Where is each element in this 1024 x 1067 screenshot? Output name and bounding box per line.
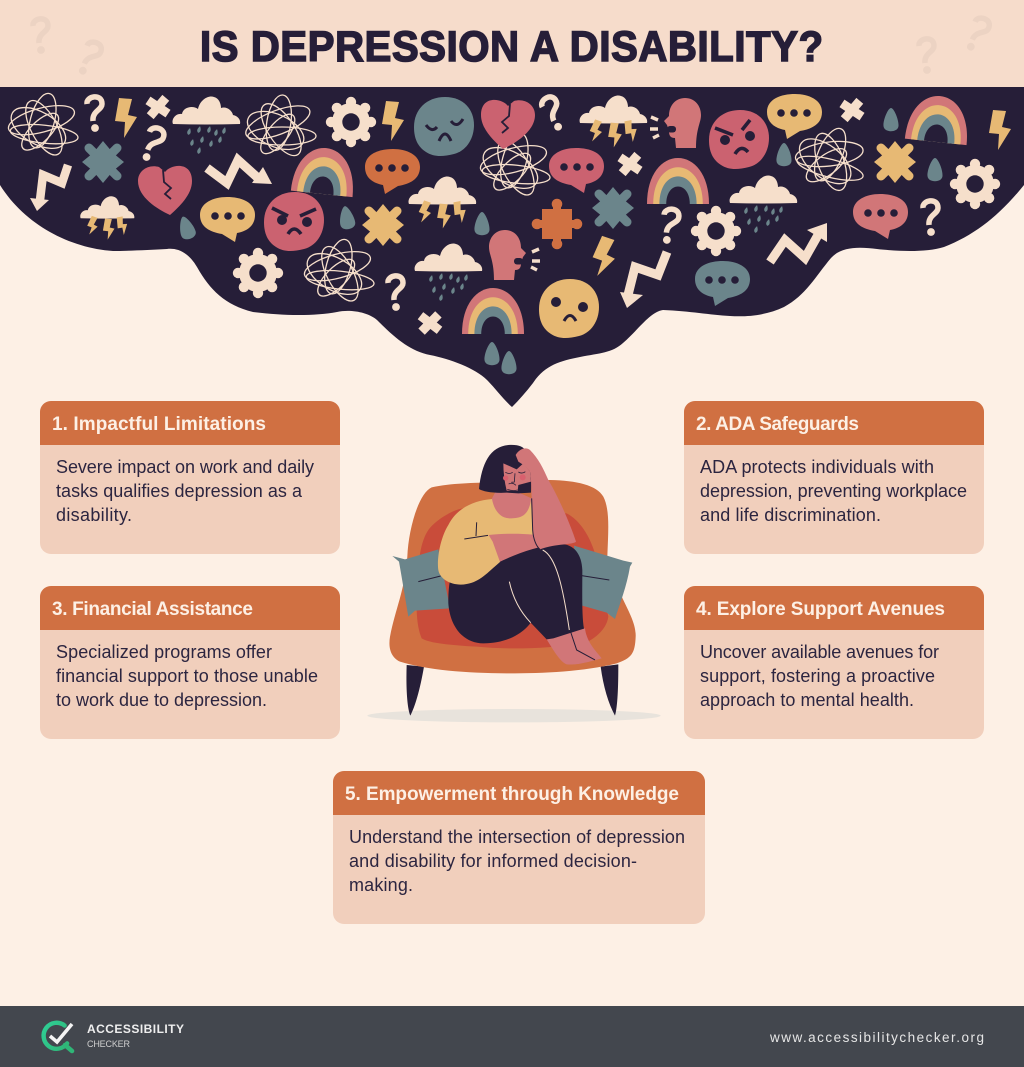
text block: and life discrimination. — [700, 505, 881, 525]
icon: crosses — [148, 98, 862, 332]
title: IS DEPRESSION A DISABILITY? — [200, 23, 823, 70]
heading: 2. ADA Safeguards — [696, 414, 859, 435]
text block — [56, 457, 314, 525]
text block — [349, 827, 685, 895]
icon: teal drops — [176, 108, 943, 374]
heading: 3. Financial Assistance — [52, 599, 253, 620]
header band — [0, 0, 1024, 87]
icon: shouting heads — [489, 98, 701, 280]
panel: empowerment through knowledge — [333, 771, 705, 924]
text block: making. — [349, 875, 413, 895]
icon: clouds with rain and lightning — [80, 96, 797, 301]
text block: approach to mental health. — [700, 690, 914, 710]
icon: sad yellow face — [539, 279, 599, 338]
icon: question marks — [87, 95, 938, 311]
facial lines — [505, 472, 525, 491]
chair cushion — [417, 508, 608, 648]
heading: 1. Impactful Limitations — [52, 414, 266, 435]
hair — [479, 445, 532, 493]
panel: ada safeguards — [684, 401, 984, 554]
text block: Uncover available avenues for — [700, 642, 939, 662]
logo wordmark: CHECKER — [87, 1039, 130, 1049]
foot — [547, 628, 602, 664]
footer bar — [0, 1006, 1024, 1067]
icon: splats — [82, 141, 916, 246]
panel: financial assistance — [40, 586, 340, 739]
pillows — [392, 546, 632, 619]
text block: to work due to depression. — [56, 690, 267, 710]
panel: impactful limitations — [40, 401, 340, 554]
torso skin — [489, 480, 540, 563]
icon: rainbows — [291, 93, 971, 334]
chair body — [389, 480, 636, 673]
icon: speech bubbles — [200, 94, 908, 306]
logo wordmark — [87, 1022, 184, 1049]
faint question marks — [33, 15, 992, 77]
heading: 4. Explore Support Avenues — [696, 599, 945, 620]
panel: explore support avenues — [684, 586, 984, 739]
icon: gears — [233, 97, 1000, 298]
icon: sad teal face — [414, 97, 474, 156]
text block: tasks qualifies depression as a — [56, 481, 303, 501]
body lines — [464, 498, 595, 660]
icon: scribbles — [4, 89, 870, 306]
text block — [700, 457, 967, 525]
icon: puzzle piece — [532, 199, 582, 249]
icon: angry face bottom — [264, 192, 324, 251]
text block: disability. — [56, 505, 132, 525]
sweater — [438, 499, 533, 585]
text block: Understand the intersection of depression — [349, 827, 685, 847]
text block: ADA protects individuals with — [700, 457, 934, 477]
cheeks — [503, 474, 526, 481]
face — [503, 463, 531, 491]
text block — [700, 642, 939, 710]
heading: 5. Empowerment through Knowledge — [345, 784, 679, 805]
text block: Severe impact on work and daily — [56, 457, 314, 477]
trousers — [448, 544, 584, 643]
text block: Specialized programs offer — [56, 642, 272, 662]
icon: lightning bolts — [115, 98, 1011, 279]
website url: www.accessibilitychecker.org — [769, 1030, 984, 1045]
text block: depression, preventing workplace — [700, 481, 967, 501]
chair legs — [406, 664, 618, 716]
icon: angry face top — [709, 110, 769, 169]
text block — [56, 642, 318, 710]
text block: financial support to those unable — [56, 666, 318, 686]
illustration: sad woman on armchair — [367, 445, 661, 722]
icon: accessibility checker logo — [42, 1022, 72, 1051]
dark thought cloud with icons — [0, 87, 1024, 407]
floor shadow — [367, 709, 661, 722]
logo wordmark: ACCESSIBILITY — [87, 1022, 184, 1036]
raised arm — [516, 448, 576, 549]
icon: zigzag arrows — [30, 160, 827, 308]
text block: and disability for informed decision- — [349, 851, 637, 871]
icon: broken hearts — [138, 100, 535, 215]
text block: support, fostering a proactive — [700, 666, 935, 686]
